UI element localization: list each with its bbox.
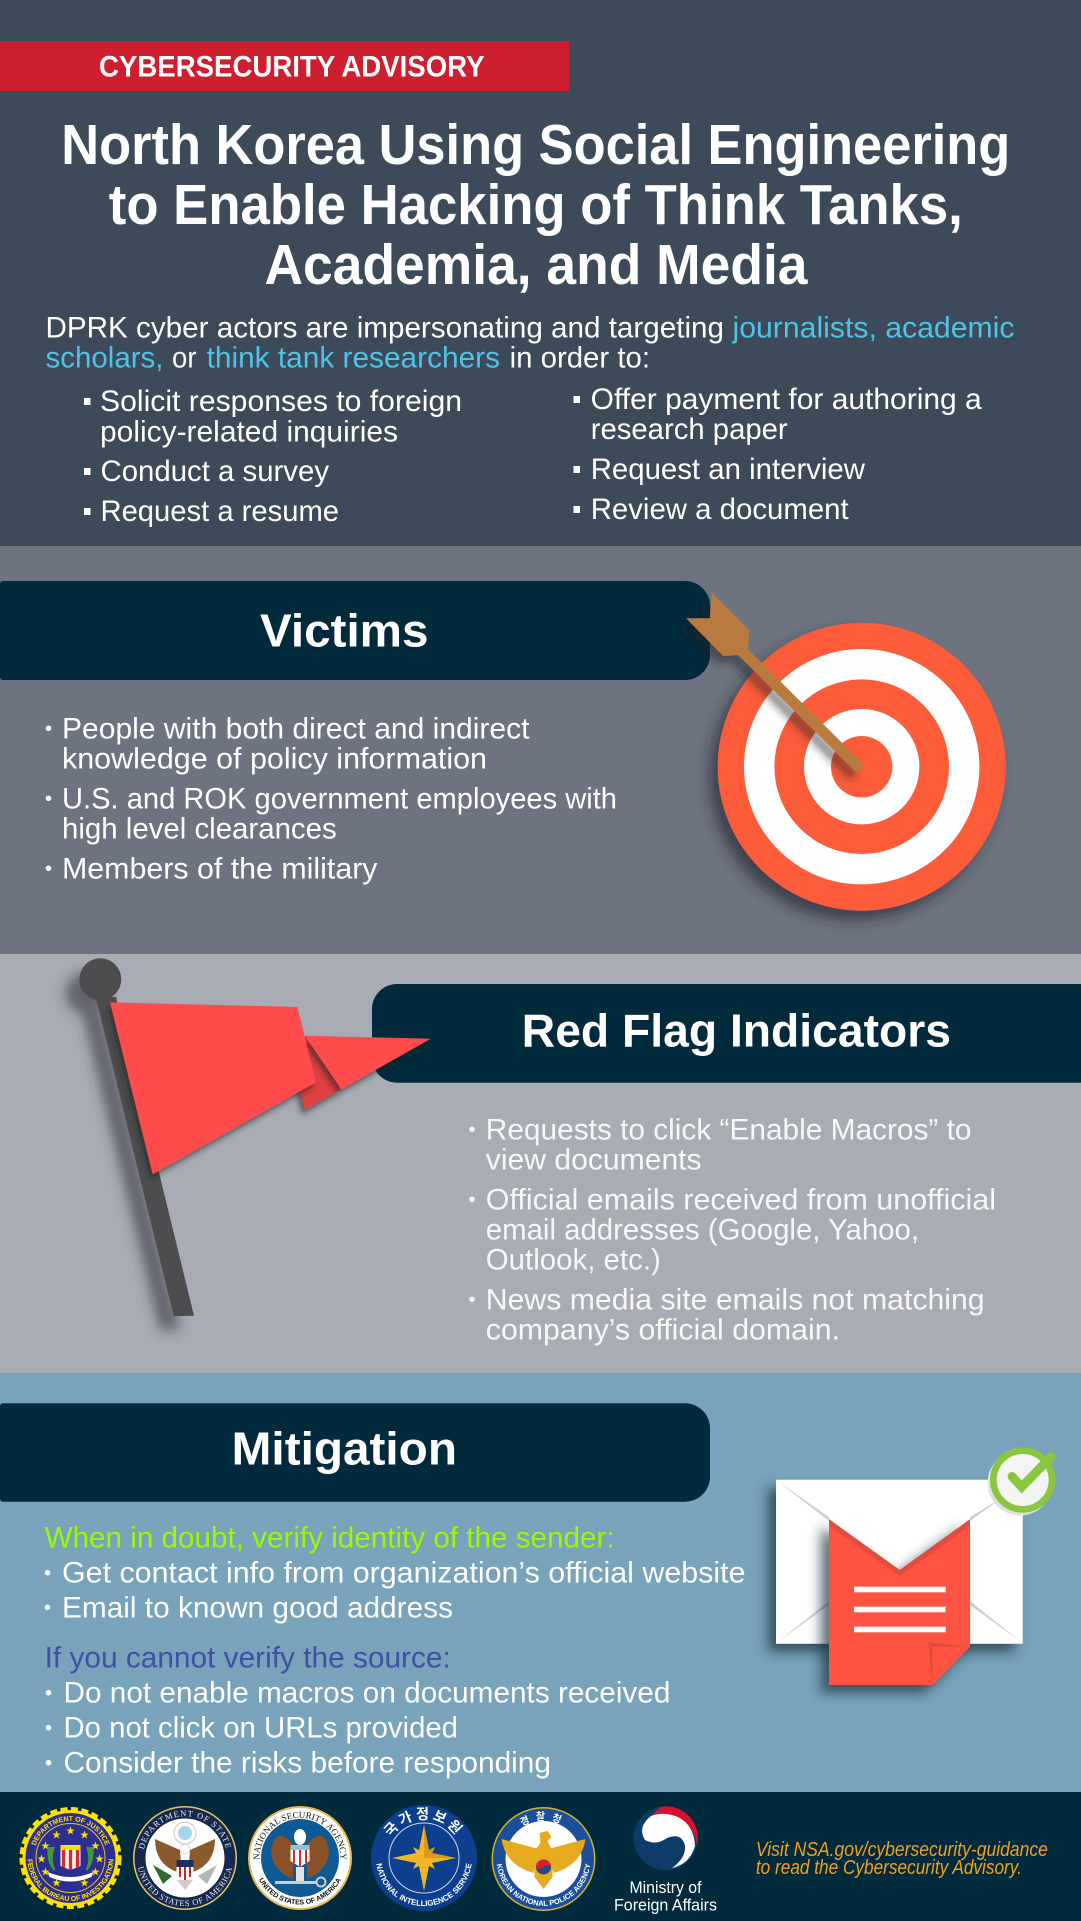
- seal: Korean National Police Agency: [492, 1807, 596, 1911]
- left bullet list: Conduct a survey: [100, 455, 329, 488]
- logo: Ministry of Foreign Affairs: Ministry of: [630, 1878, 702, 1897]
- icon: target board: [718, 623, 1006, 911]
- cannot verify text block: Do not click on URLs provided: [64, 1711, 458, 1744]
- seal: FBI: ★: [91, 1841, 100, 1851]
- red flag bullet list: company’s official domain.: [486, 1313, 840, 1346]
- victims bullet list: People with both direct and indirect: [62, 712, 530, 745]
- heading bar: mitigation: Mitigation: [232, 1422, 457, 1474]
- left bullet list: [84, 385, 462, 528]
- red flag bullet list: [469, 1113, 996, 1346]
- heading bar: mitigation: [0, 1403, 710, 1502]
- logo: Ministry of Foreign Affairs: Foreign Affairs: [614, 1896, 717, 1915]
- left bullet list: Request a resume: [100, 495, 339, 528]
- icon: envelope with document: [776, 1480, 1023, 1685]
- seal: Korean National Police Agency: KOREAN NATIONAL POLICE AGENCY: [496, 1863, 590, 1906]
- cannot verify text block: If you cannot verify the source:: [45, 1641, 451, 1674]
- seal: FBI: ★: [41, 1841, 50, 1851]
- advisory banner: CYBERSECURITY ADVISORY: [99, 51, 484, 84]
- seal: National Intelligence Service: [371, 1805, 477, 1911]
- intro text: in order to:: [510, 342, 650, 375]
- cannot verify text block: Consider the risks before responding: [64, 1746, 551, 1779]
- seal: FBI: ★: [52, 1878, 61, 1888]
- seal: FBI: ★: [66, 1826, 75, 1836]
- right bullet list: [574, 383, 982, 526]
- seal: FBI: ★: [37, 1854, 46, 1864]
- cannot verify text block: Do not enable macros on documents received: [64, 1676, 670, 1709]
- red flag bullet list: Official emails received from unofficial: [486, 1183, 996, 1216]
- seal: FBI: [20, 1807, 122, 1909]
- cannot verify text block: [45, 1641, 670, 1779]
- victims bullet list: [46, 712, 617, 885]
- seal: FBI: ★: [52, 1830, 61, 1840]
- panel: victims: [0, 546, 1081, 955]
- verify identity text block: [45, 1521, 745, 1624]
- panel: red flag indicators: [0, 954, 1081, 1373]
- red flag bullet list: email addresses (Google, Yahoo,: [486, 1213, 919, 1246]
- seal: National Security Agency: [248, 1806, 352, 1910]
- heading bar: red flag indicators: Red Flag Indicators: [522, 1004, 951, 1056]
- seal: FBI: DEPARTMENT OF JUSTICE: [31, 1816, 110, 1846]
- heading bar: victims: [0, 581, 710, 680]
- red flag bullet list: Requests to click “Enable Macros” to: [486, 1113, 972, 1146]
- call to action text: Visit NSA.gov/cybersecurity-guidance: [756, 1839, 1048, 1861]
- seal: FBI: FEDERAL BUREAU OF INVESTIGATION: [28, 1859, 114, 1901]
- seal: Department of State: [133, 1806, 237, 1910]
- logo: Ministry of Foreign Affairs: [614, 1806, 717, 1915]
- verify identity text block: Get contact info from organization’s official website: [62, 1556, 745, 1589]
- victims bullet list: knowledge of policy information: [62, 742, 487, 775]
- title: Academia, and Media: [264, 233, 809, 297]
- seal: FBI: ★: [80, 1878, 89, 1888]
- victims bullet list: U.S. and ROK government employees with: [62, 782, 617, 815]
- seal: FBI: ★: [95, 1854, 104, 1864]
- title: [61, 113, 1010, 297]
- title: North Korea Using Social Engineering: [61, 113, 1010, 177]
- red flag bullet list: Outlook, etc.): [486, 1243, 661, 1276]
- icon: arrow: [686, 592, 858, 766]
- verify identity text block: When in doubt, verify identity of the sender:: [45, 1521, 615, 1554]
- panel: mitigation: [0, 1373, 1081, 1792]
- call to action text: to read the Cybersecurity Advisory.: [756, 1857, 1022, 1879]
- left bullet list: policy-related inquiries: [100, 415, 398, 448]
- icon: check badge: [988, 1447, 1055, 1516]
- right bullet list: research paper: [591, 413, 788, 446]
- seal: Department of State: DEPARTMENT OF STATE: [138, 1810, 232, 1850]
- victims bullet list: Members of the military: [62, 852, 378, 885]
- seal: FBI: ★: [41, 1867, 50, 1877]
- red flag bullet list: News media site emails not matching: [486, 1283, 985, 1316]
- seal: National Intelligence Service: NATIONAL INTELLIGENCE SERVICE: [376, 1863, 472, 1906]
- right bullet list: Review a document: [591, 493, 849, 526]
- heading bar: red flag indicators: [372, 984, 1081, 1083]
- verify identity text block: Email to known good address: [62, 1591, 453, 1624]
- right bullet list: Offer payment for authoring a: [591, 383, 982, 416]
- seal: FBI: ★: [91, 1867, 100, 1877]
- advisory banner: [0, 41, 569, 91]
- victims bullet list: high level clearances: [62, 812, 337, 845]
- intro text: [46, 312, 1014, 375]
- seal: Department of State: UNITED STATES OF AMERICA: [138, 1866, 232, 1906]
- intro text: journalists, academic: [731, 312, 1014, 345]
- seal: Korean National Police Agency: 경찰청: [520, 1811, 562, 1826]
- heading bar: victims: Victims: [260, 604, 428, 656]
- panel: header: [0, 0, 1081, 546]
- intro text: think tank researchers: [207, 342, 500, 375]
- seal: National Security Agency: NATIONAL SECURITY AGENCY: [254, 1812, 346, 1860]
- panel: footer: [20, 1805, 1048, 1915]
- intro text: DPRK cyber actors are impersonating and targeting: [46, 312, 724, 345]
- title: to Enable Hacking of Think Tanks,: [109, 173, 963, 237]
- intro text: scholars,: [46, 342, 164, 375]
- right bullet list: Request an interview: [591, 453, 866, 486]
- intro text: or: [172, 342, 197, 375]
- left bullet list: Solicit responses to foreign: [100, 385, 462, 418]
- red flag bullet list: view documents: [486, 1143, 702, 1176]
- icon: red flag: [79, 958, 431, 1316]
- seal: National Security Agency: UNITED STATES OF AMERICA: [260, 1878, 342, 1904]
- call to action text: [756, 1839, 1048, 1879]
- seal: National Intelligence Service: 국가정보원: [383, 1806, 464, 1835]
- seal: FBI: ★: [80, 1830, 89, 1840]
